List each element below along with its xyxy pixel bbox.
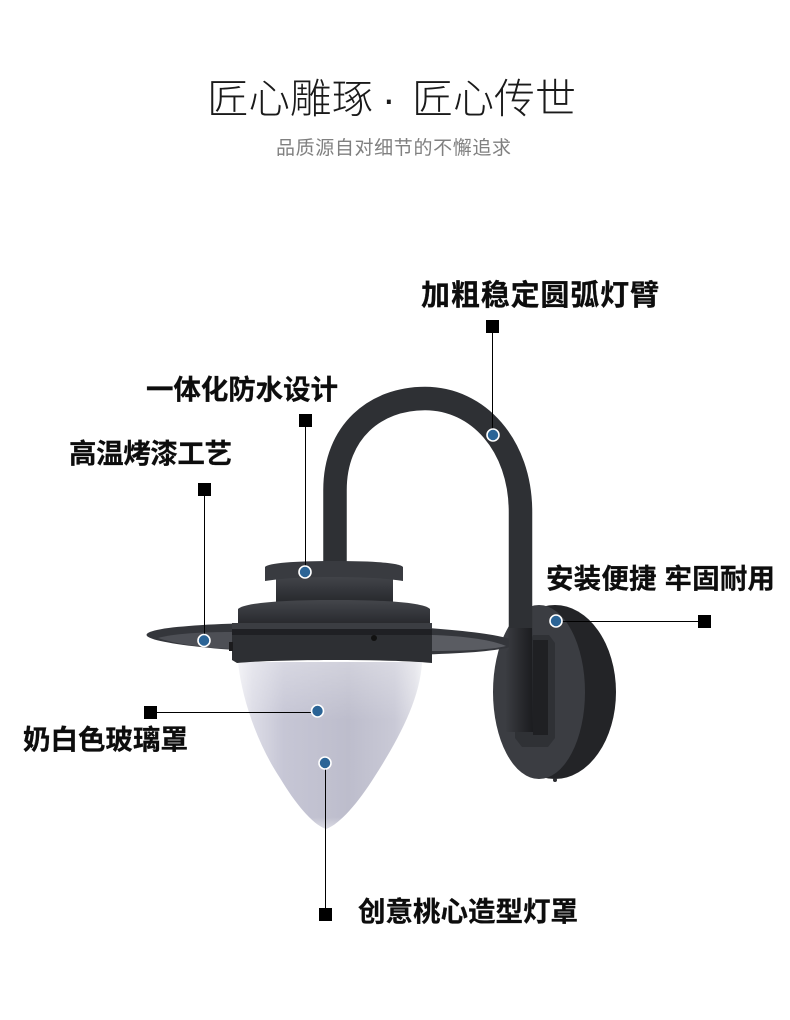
lamp lower arm overlapping brim (506, 628, 533, 732)
lamp metal band (229, 623, 432, 663)
lamp upper cap (238, 600, 430, 625)
callout: 安装便捷 牢固耐用: 安装便捷 牢固耐用 (546, 563, 775, 594)
lamp top disc and neck (265, 561, 403, 603)
callout: 创意桃心造型灯罩 (319, 757, 578, 927)
callout: 高温烤漆工艺: 高温烤漆工艺 (69, 438, 232, 469)
callout: 创意桃心造型灯罩: 创意桃心造型灯罩 (358, 896, 578, 927)
lamp curved arm (335, 398, 520, 640)
title: 匠心传世 (412, 76, 576, 122)
title: 匠心雕琢 (207, 76, 373, 122)
lamp wide brim ring (146, 619, 517, 659)
callout: 奶白色玻璃罩: 奶白色玻璃罩 (23, 724, 188, 755)
callout: 一体化防水设计: 一体化防水设计 (146, 374, 338, 405)
callout: 奶白色玻璃罩 (23, 705, 324, 755)
glass shade (238, 662, 422, 829)
title (207, 76, 576, 122)
wall lamp product illustration (146, 398, 616, 829)
callout: 一体化防水设计 (146, 374, 338, 578)
callout: 高温烤漆工艺 (69, 438, 232, 646)
callout: 加粗稳定圆弧灯臂: 加粗稳定圆弧灯臂 (421, 279, 659, 312)
title: · (382, 76, 396, 122)
lamp wall plate (493, 605, 616, 782)
subtitle: 品质源自对细节的不懈追求 (276, 137, 511, 159)
callout: 加粗稳定圆弧灯臂 (421, 279, 659, 441)
callout: 安装便捷 牢固耐用 (546, 563, 775, 628)
